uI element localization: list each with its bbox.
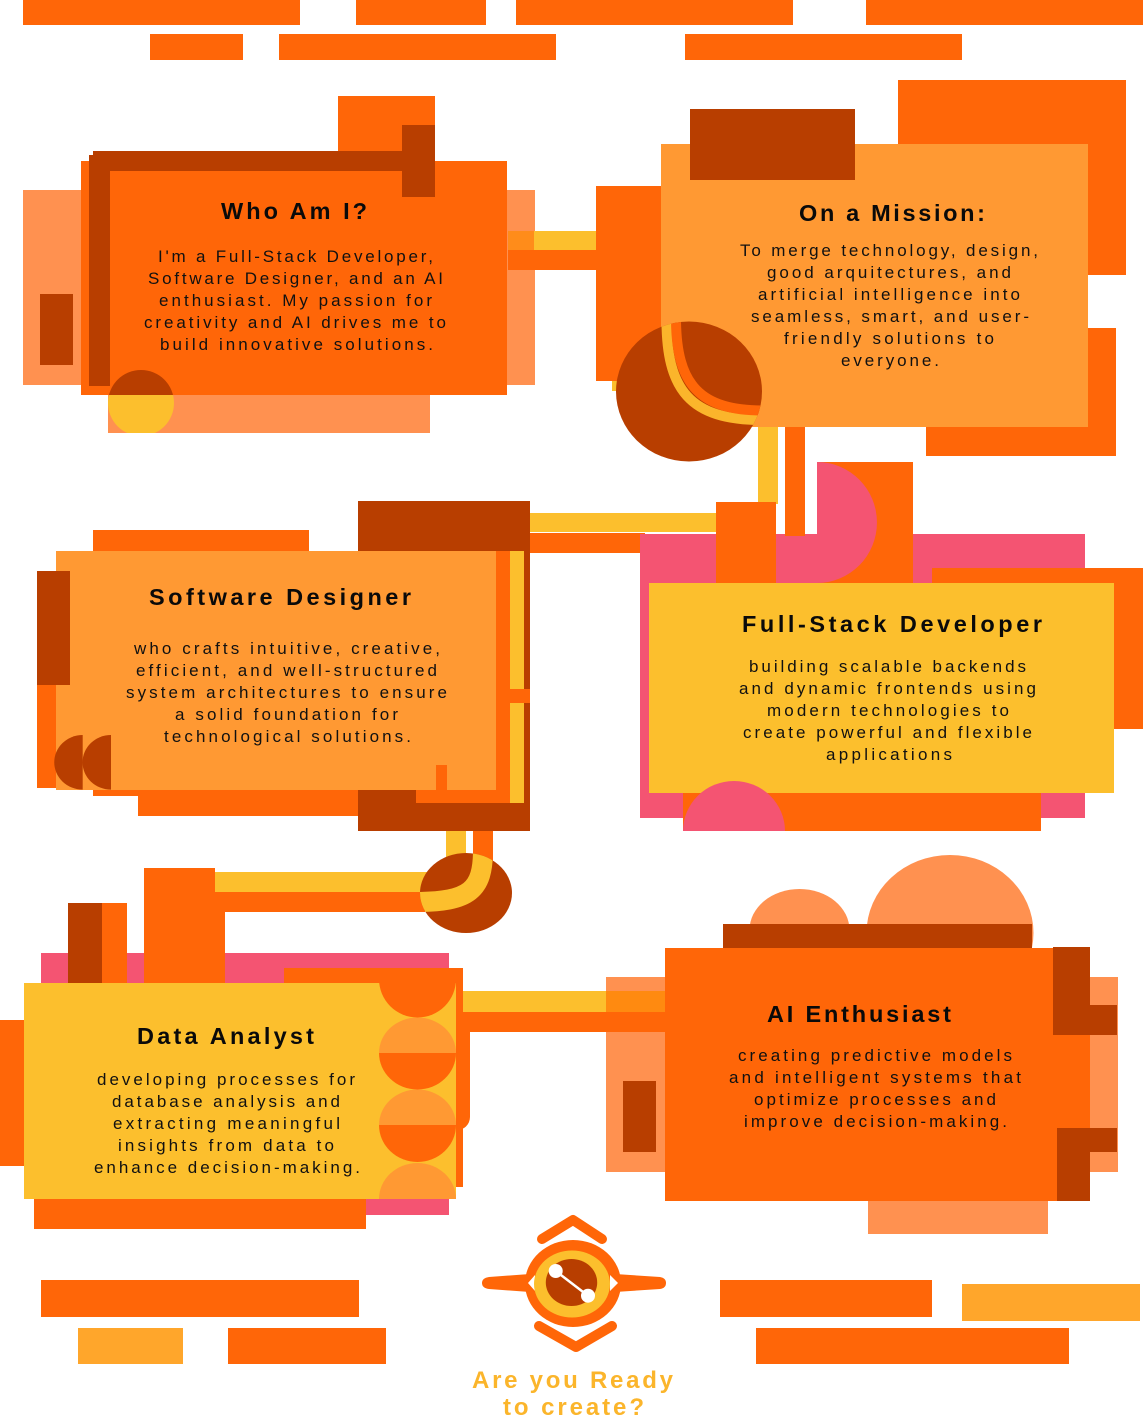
text block: Full-Stack Developer: create powerful and flexible <box>743 723 1032 742</box>
text block: AI Enthusiast: optimize processes and <box>754 1090 996 1109</box>
text block: Software Designer: system architectures to ensure <box>126 683 447 702</box>
connector: full-stack to software designer <box>530 513 720 553</box>
text block: AI Enthusiast: creating predictive models <box>738 1046 1012 1065</box>
text block: Data Analyst: enhance decision-making. <box>94 1158 360 1177</box>
text block: On a Mission: artificial intelligence into <box>758 285 1020 304</box>
text block: Who Am I: build innovative solutions. <box>160 335 433 354</box>
icon: circle with curved bands <box>616 318 765 462</box>
connector: mission to full-stack <box>758 420 805 536</box>
text block: Who Am I: enthusiast. My passion for <box>159 291 432 310</box>
panel: Full-Stack Developer <box>640 462 1143 831</box>
text block: On a Mission: good arquitectures, and <box>767 263 1011 282</box>
panel: Software Designer <box>37 501 530 831</box>
text block: Full-Stack Developer: modern technologies to <box>767 701 1009 720</box>
closing tagline <box>472 1367 674 1416</box>
text block: Data Analyst <box>94 1070 360 1177</box>
panel: On a Mission <box>616 80 1126 462</box>
text block: Data Analyst: extracting meaningful <box>113 1114 340 1133</box>
text block: On a Mission: everyone. <box>841 351 939 370</box>
top placeholder bars <box>23 0 1143 60</box>
text block: Who Am I <box>144 247 446 354</box>
icon: ellipse with curved band <box>415 850 512 933</box>
heading: AI Enthusiast: AI Enthusiast <box>767 1001 951 1027</box>
panel: Who Am I <box>23 96 535 433</box>
text block: On a Mission: friendly solutions to <box>784 329 994 348</box>
text block: On a Mission: seamless, smart, and user- <box>751 307 1029 326</box>
text block: Full-Stack Developer: building scalable backends <box>749 657 1026 676</box>
text block: Who Am I: I'm a Full-Stack Developer, <box>158 247 433 266</box>
text block: Software Designer: efficient, and well-structured <box>136 661 437 680</box>
text block: AI Enthusiast <box>729 1046 1021 1131</box>
icon: stacked half circles <box>284 968 456 1199</box>
text block: Full-Stack Developer <box>739 657 1036 764</box>
heading: Software Designer: Software Designer <box>149 584 411 610</box>
text block: On a Mission <box>740 241 1038 370</box>
text block: Software Designer <box>126 639 447 746</box>
closing tagline: Are you Ready <box>472 1367 674 1394</box>
text block: Data Analyst: database analysis and <box>112 1092 340 1111</box>
heading: On a Mission: On a Mission: <box>799 200 985 226</box>
text block: AI Enthusiast: and intelligent systems that <box>729 1068 1021 1087</box>
text block: Software Designer: who crafts intuitive, creative, <box>133 639 440 658</box>
text block: Full-Stack Developer: and dynamic frontends using <box>739 679 1036 698</box>
heading: Who Am I: Who Am I? <box>221 198 367 224</box>
icon: two-tone circle <box>108 370 174 433</box>
heading: Data Analyst: Data Analyst <box>137 1023 314 1049</box>
bottom left placeholder bars <box>41 1280 386 1364</box>
text block: On a Mission: To merge technology, design, <box>740 241 1038 260</box>
heading: Full-Stack Developer: Full-Stack Developer <box>742 611 1042 637</box>
text block: Who Am I: Software Designer, and an AI <box>148 269 443 288</box>
text block: Data Analyst: developing processes for <box>97 1070 355 1089</box>
connector: data analyst to AI enthusiast <box>463 991 665 1032</box>
text block: Data Analyst: insights from data to <box>118 1136 334 1155</box>
connector: who am I to mission <box>508 186 666 391</box>
text block: Software Designer: a solid foundation for <box>175 705 398 724</box>
text block: Full-Stack Developer: applications <box>826 745 952 764</box>
text block: AI Enthusiast: improve decision-making. <box>744 1112 1007 1131</box>
panel: AI Enthusiast <box>463 855 1118 1234</box>
bottom right placeholder bars <box>720 1280 1140 1364</box>
text block: Software Designer: technological solutions. <box>164 727 411 746</box>
panel: Data Analyst <box>0 903 470 1229</box>
connector: software designer to data analyst <box>144 831 512 953</box>
text block: Who Am I: creativity and AI drives me to <box>144 313 446 332</box>
icon: half circles <box>54 735 111 790</box>
icon: eye logo <box>482 1220 666 1347</box>
